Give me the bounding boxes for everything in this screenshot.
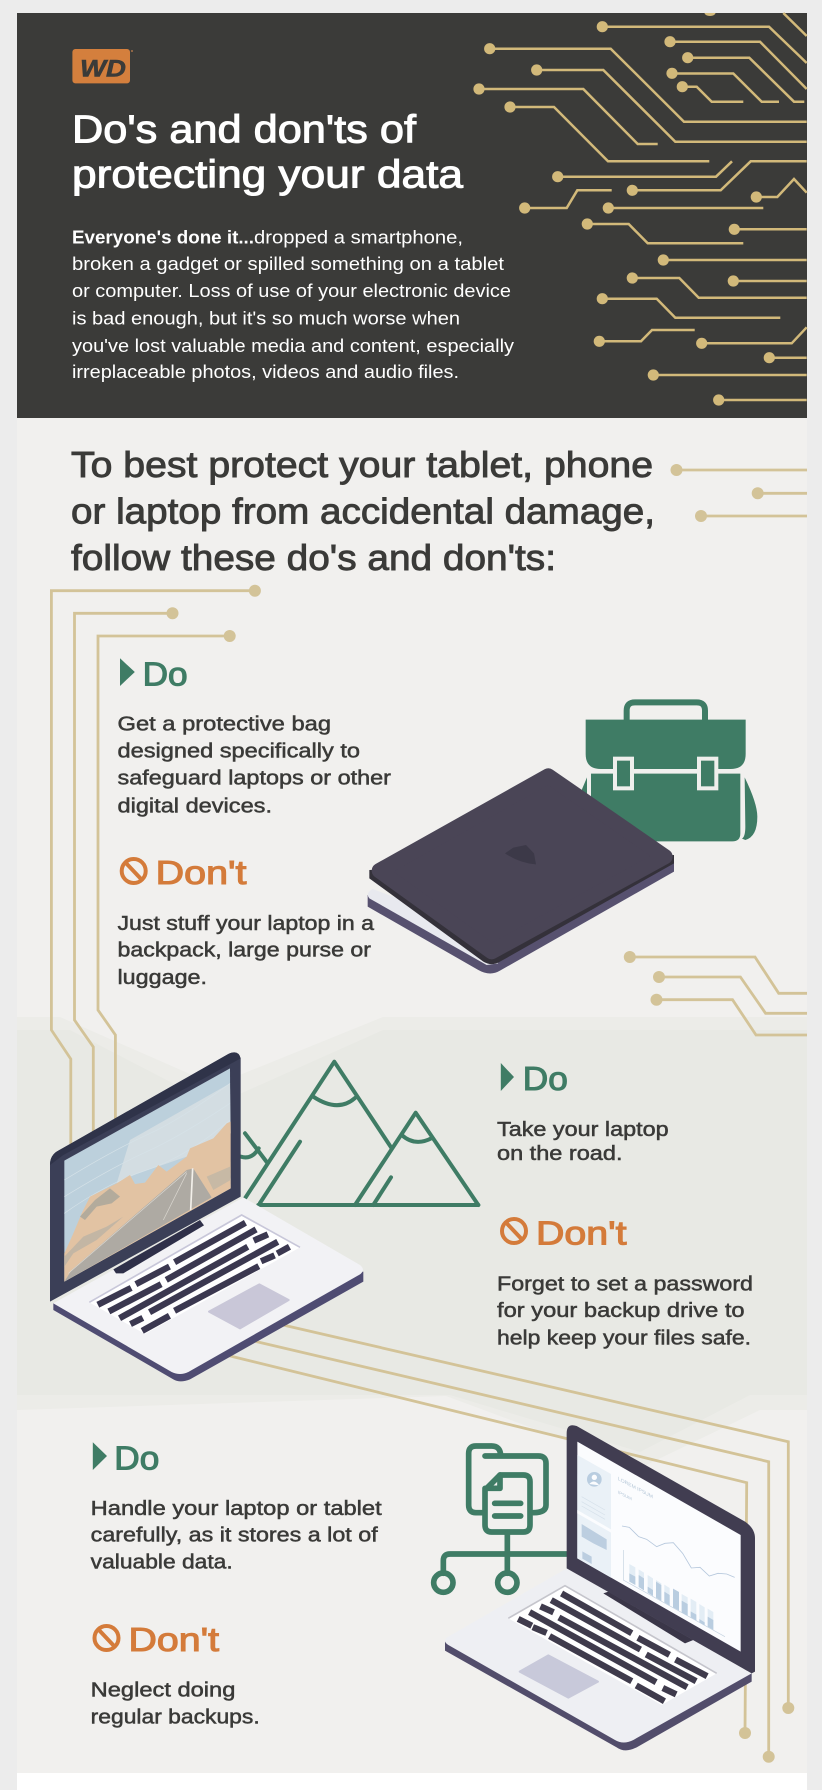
text block: intro: you've lost valuable media and content, especially <box>72 335 515 356</box>
section 2: do <box>497 1060 669 1165</box>
illustration: open laptop with desert road <box>50 1052 363 1381</box>
do text: digital devices. <box>118 795 272 817</box>
do text: designed specifically to <box>118 740 360 762</box>
text block: intro: dropped a smartphone, <box>254 226 463 247</box>
icon: WD logo <box>72 49 133 83</box>
title <box>72 109 463 196</box>
do heading: Do <box>143 655 188 692</box>
don't text: Neglect doing <box>91 1680 235 1702</box>
laptop screen: LOREM IPSUM <box>618 1476 653 1500</box>
don't text <box>91 1680 260 1728</box>
do heading: Do <box>114 1439 159 1476</box>
icon: prohibited <box>94 1626 118 1650</box>
text block: intro: broken a gadget or spilled something on a tablet <box>72 253 504 274</box>
icon: green bag <box>582 702 757 841</box>
don't text: Forget to set a password <box>497 1274 753 1296</box>
don't text: luggage. <box>118 967 207 989</box>
heading: to best protect <box>71 444 655 578</box>
laptop base <box>53 1197 363 1381</box>
circuit lines: heading right <box>670 464 807 522</box>
circuit lines: diagonal to bottom <box>222 1322 794 1763</box>
section 1: do <box>118 655 391 817</box>
illustration: closed laptop <box>368 776 674 974</box>
panel: middle band background <box>17 1017 807 1468</box>
keyboard <box>89 1215 300 1334</box>
icon: do arrow <box>120 658 135 686</box>
don't text: help keep your files safe. <box>497 1327 751 1349</box>
illustration: open laptop with dashboard <box>445 1425 755 1750</box>
section 3: don't <box>91 1621 260 1728</box>
icon: do arrow <box>93 1442 107 1470</box>
text block: intro: Everyone's done it... <box>72 226 254 247</box>
panel: dark header <box>17 13 807 418</box>
don't text: Just stuff your laptop in a <box>118 913 375 935</box>
heading: to best protect: To best protect your tablet, phone <box>71 444 653 485</box>
do text <box>497 1119 669 1165</box>
don't heading: Don't <box>536 1214 627 1251</box>
do text: Get a protective bag <box>118 714 331 736</box>
don't text <box>118 913 375 989</box>
don't text: regular backups. <box>91 1706 260 1728</box>
do text: carefully, as it stores a lot of <box>91 1525 378 1547</box>
don't text <box>497 1274 753 1349</box>
icon: WD logo: WD <box>80 56 126 82</box>
don't heading: Don't <box>128 1621 219 1658</box>
laptop screen <box>567 1425 755 1673</box>
do text: safeguard laptops or other <box>118 767 391 789</box>
text block: intro: is bad enough, but it's so much worse when <box>72 308 460 328</box>
text block: intro <box>72 226 515 382</box>
laptop screen: IPSUM <box>618 1490 632 1502</box>
heading: to best protect: or laptop from accidental damage, <box>71 490 655 532</box>
icon: folder and network <box>434 1446 567 1592</box>
circuit lines: header <box>473 13 807 406</box>
icon: prohibited <box>122 859 146 883</box>
icon: mountains <box>241 1062 478 1205</box>
text block: intro: irreplaceable photos, videos and audio files. <box>72 361 459 382</box>
do text: Handle your laptop or tablet <box>91 1498 382 1520</box>
do text <box>91 1498 382 1573</box>
panel: light content background <box>17 418 807 1773</box>
title: Do's and don'ts of <box>72 109 416 152</box>
icon: do arrow <box>501 1063 514 1091</box>
heading: to best protect: follow these do's and don'ts: <box>71 537 556 578</box>
do text: on the road. <box>497 1143 622 1165</box>
don't heading: Don't <box>156 854 246 891</box>
keyboard <box>508 1586 717 1705</box>
text block: intro: or computer. Loss of use of your electronic device <box>72 280 511 301</box>
do text: Take your laptop <box>497 1119 669 1141</box>
laptop screen <box>50 1052 241 1302</box>
do heading: Do <box>523 1060 568 1097</box>
icon: prohibited <box>502 1219 526 1243</box>
don't text: for your backup drive to <box>497 1300 745 1322</box>
section 3: do <box>91 1439 382 1573</box>
don't text: backpack, large purse or <box>118 940 371 962</box>
title: protecting your data <box>72 154 463 196</box>
circuit lines: left <box>51 585 261 1145</box>
do text: valuable data. <box>91 1551 233 1573</box>
section 1: don't <box>118 854 375 989</box>
circuit lines: right middle <box>624 951 807 1035</box>
do text <box>118 714 391 817</box>
laptop base <box>445 1568 752 1750</box>
section 2: don't <box>497 1214 753 1349</box>
